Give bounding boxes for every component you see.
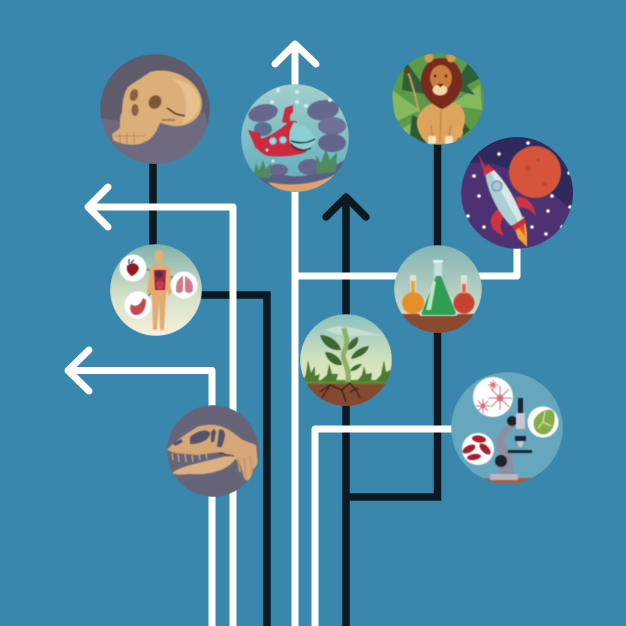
black arrow pointing up	[326, 197, 366, 626]
microscope	[496, 421, 516, 478]
organ: heart	[120, 254, 146, 282]
white line: main stem to flask to rocket	[295, 240, 517, 276]
submarine hull	[254, 121, 312, 156]
icon: microscope with cells	[451, 372, 563, 486]
white connector network	[68, 44, 517, 626]
infographic canvas	[64, 40, 573, 626]
submarine tower	[282, 105, 293, 124]
organ: lungs	[170, 272, 198, 298]
white arrow pointing left, lower	[68, 350, 212, 626]
black line: body down to bottom	[195, 295, 267, 626]
cell: pink viruses	[473, 377, 513, 417]
white arrow pointing left, upper	[88, 187, 233, 626]
icon: chemistry flasks	[394, 245, 482, 336]
cell: green	[528, 406, 558, 438]
icon: plant with roots	[298, 314, 394, 411]
black connector network	[153, 140, 438, 626]
white line: bottom to microscope	[315, 429, 460, 626]
black line: lion through flask to centre stem	[346, 140, 438, 497]
icon: submarine under water	[241, 84, 349, 200]
icon: lion in jungle	[392, 53, 484, 145]
icon: human skull	[100, 54, 210, 164]
icon: rocket and planet	[461, 137, 573, 249]
organ: stomach	[124, 292, 152, 318]
icon: dinosaur skull	[167, 405, 259, 497]
figure	[154, 250, 164, 262]
icon: human anatomy	[110, 244, 202, 336]
black line: skull to body	[149, 160, 157, 250]
cell: red blood	[462, 433, 494, 465]
white arrow pointing up	[275, 44, 316, 626]
submarine tail	[248, 130, 262, 149]
